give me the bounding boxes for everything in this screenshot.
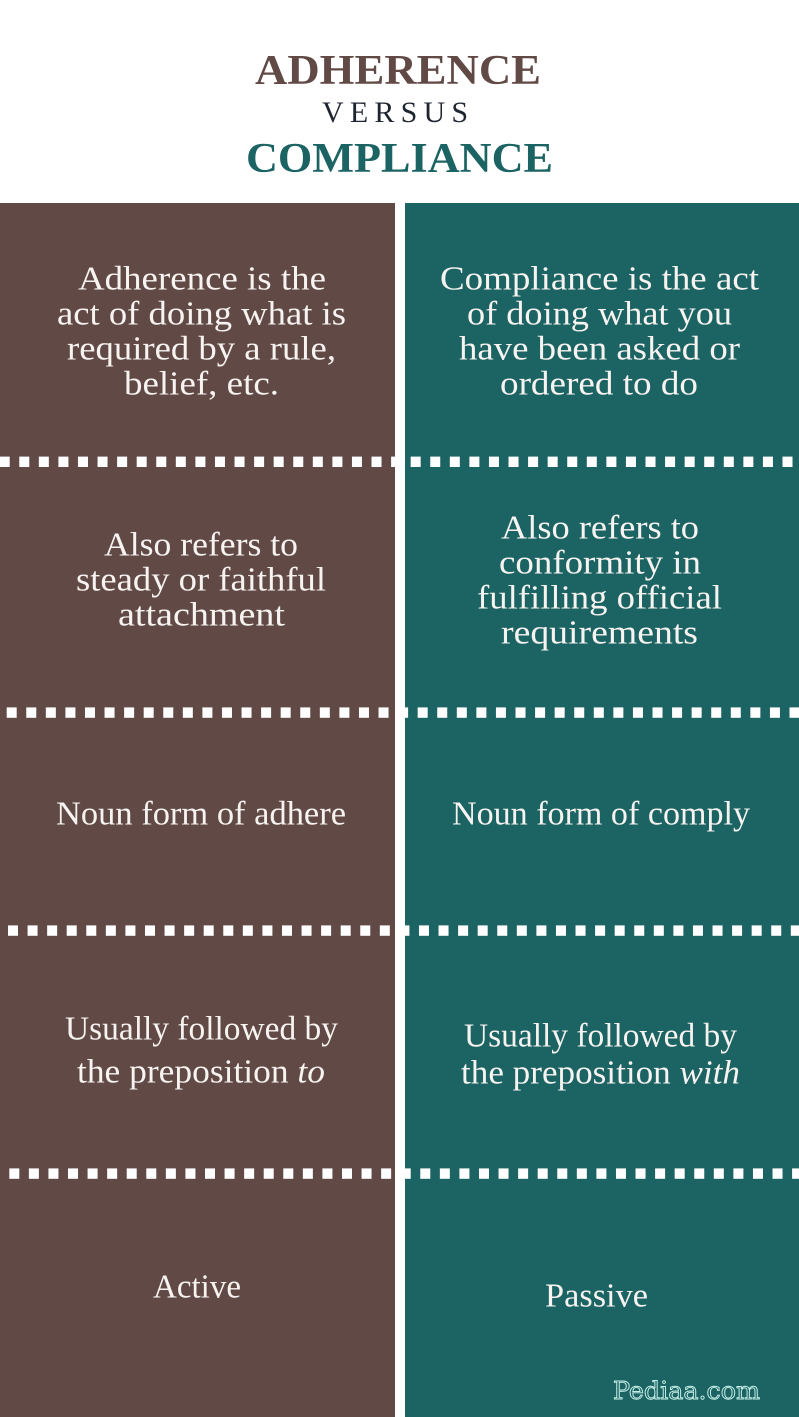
row 1 right: definition of compliance: Compliance is the act [440, 260, 760, 298]
row 3 right: noun form of comply: Noun form of comply [452, 796, 750, 832]
row dividers [0, 457, 799, 1179]
panel: adherence column [0, 203, 395, 1417]
heading: compliance: COMPLIANCE [246, 136, 553, 182]
logo: Pediaa.com: Pediaa.com [613, 1377, 760, 1405]
row 4 left: preposition to: the preposition to [77, 1054, 325, 1090]
row 1 right: definition of compliance: ordered to do [500, 366, 698, 402]
row 2 right: second meaning of compliance: conformity in [499, 544, 701, 582]
row 4 right: preposition with [461, 1018, 740, 1092]
row 5 right: passive: Passive [545, 1278, 648, 1314]
panel: compliance column [405, 203, 799, 1417]
row 1 left: definition of adherence: required by a rule, [67, 330, 336, 368]
heading: versus: VERSUS [322, 96, 468, 129]
row 1 left: definition of adherence [57, 260, 346, 402]
row 1 left: definition of adherence: Adherence is the [78, 260, 326, 298]
row 4 right: preposition with: Usually followed by [464, 1018, 737, 1054]
row 1 right: definition of compliance [440, 260, 760, 402]
row 2 left: second meaning of adherence: Also refers to [104, 526, 298, 564]
title [246, 48, 553, 182]
row 2 right: second meaning of compliance: fulfilling official [477, 580, 722, 616]
heading: adherence: ADHERENCE [255, 48, 541, 94]
row 4 left: preposition to [65, 1010, 338, 1090]
row 3 left: noun form of adhere: Noun form of adhere [56, 796, 346, 832]
row 1 left: definition of adherence: belief, etc. [124, 366, 279, 402]
row 2 left: second meaning of adherence [76, 526, 326, 634]
row 2 right: second meaning of compliance [477, 510, 722, 652]
row 4 right: preposition with: the preposition with [461, 1054, 740, 1092]
row 2 right: second meaning of compliance: Also refers to [501, 510, 699, 546]
row 2 left: second meaning of adherence: attachment [118, 596, 286, 634]
row 1 right: definition of compliance: have been asked or [459, 330, 741, 368]
row 1 right: definition of compliance: of doing what you [467, 296, 732, 332]
row 2 right: second meaning of compliance: requirements [501, 614, 698, 652]
row 2 left: second meaning of adherence: steady or faithful [76, 562, 326, 598]
row 1 left: definition of adherence: act of doing what is [57, 296, 346, 332]
row 4 left: preposition to: Usually followed by [65, 1010, 338, 1048]
row 5 left: active: Active [153, 1268, 241, 1306]
